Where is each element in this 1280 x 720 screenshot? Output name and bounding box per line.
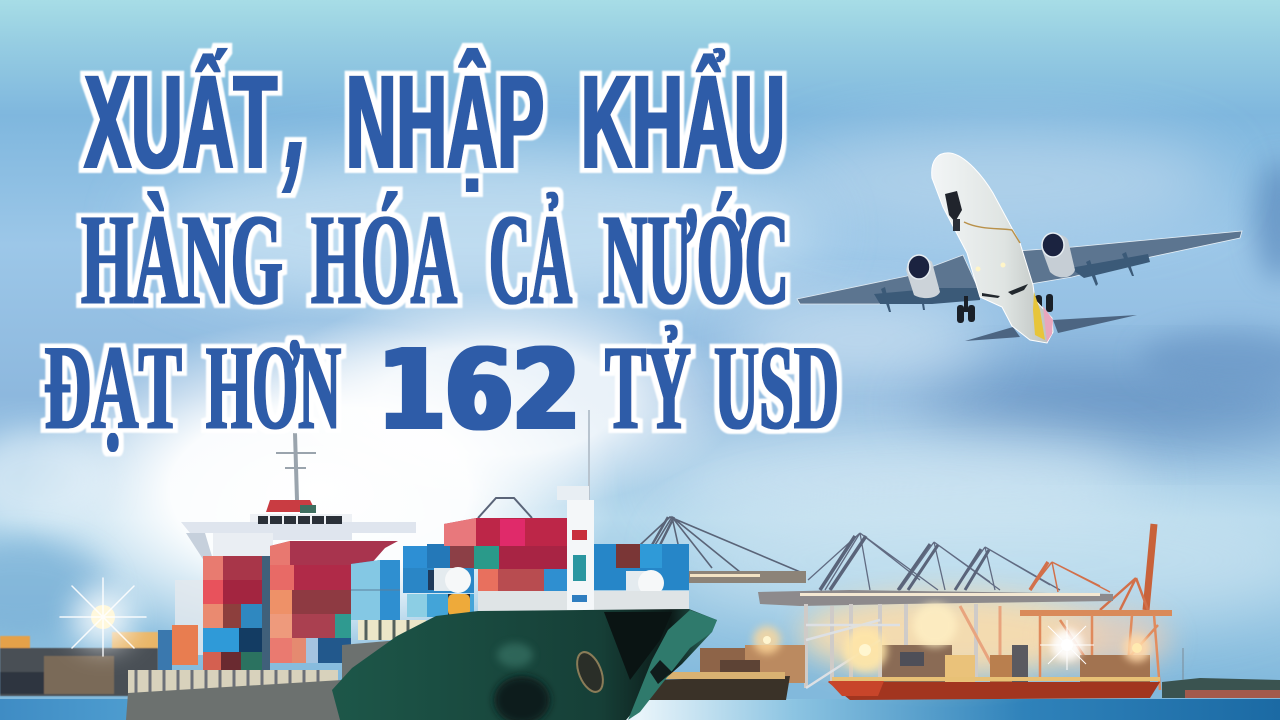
container stack A [203,556,270,673]
white lashing tower [557,410,594,610]
title line 3: TỶ [605,321,691,455]
title line 1 [84,14,785,203]
ship lower grey hull [126,640,400,720]
container stack C [351,560,400,620]
container ship [126,410,717,720]
belly fairing marks [982,284,1028,298]
hawse pipe [572,648,608,696]
left engine [906,255,940,298]
left port with containers [0,632,158,696]
nose gear bay [945,191,962,231]
tailplane [965,315,1137,341]
orange tank container [448,594,470,616]
title line 3: USD [714,321,839,455]
crane main girder [758,590,1113,606]
title line 2: HÓA [311,188,457,332]
icon: sun flare at left [60,578,146,656]
hull highlights and shadow [494,610,717,720]
title line 3: HƠN [206,321,341,455]
landing lights [976,262,1006,272]
title line 2: HÀNG [81,188,283,332]
wing flap details [874,252,1150,312]
title line 1: XUẤT [84,47,277,197]
container stack B [270,541,398,663]
container stack F [594,544,689,590]
title [44,14,839,455]
title line 3: ĐẠT [44,321,182,455]
water strip [0,699,1280,720]
distant shoreline [1162,648,1280,698]
landing gear [957,294,1053,323]
deck railing and cargo [128,620,426,694]
quay containers [700,645,1150,686]
icon: airplane [797,153,1242,343]
ship superstructure [158,433,416,670]
title line 3: 162 [378,326,580,454]
tail livery [1033,292,1053,342]
crane lights glow [800,593,1170,677]
red container ship [828,677,1160,700]
fuselage stripe [964,222,1020,243]
orange crane [1020,524,1172,690]
container stack D [403,542,476,617]
crane legs [806,604,1000,688]
fuselage [932,153,1053,343]
title line 1: KHẨU [581,47,785,197]
container stack E [444,518,567,591]
title: NƯỚC [603,188,789,332]
crane lights [753,603,1151,672]
background gantry crane behind ship [478,498,806,583]
white deck structure [478,591,689,612]
title line 1: , [277,14,325,203]
title line 2 [81,188,789,332]
ship green bow hull [332,609,717,720]
right wing [1017,231,1242,284]
dark moored ship [648,672,790,700]
right port gantry cranes [648,524,1280,700]
crane booms and cables [808,533,1060,590]
title line 3 [44,321,839,455]
title line 1: NHẬP [346,48,544,197]
left wing [797,255,982,304]
title line 2: CẢ [489,188,572,332]
anchor [650,660,672,684]
right engine [1042,233,1075,277]
white tank containers [434,567,664,596]
